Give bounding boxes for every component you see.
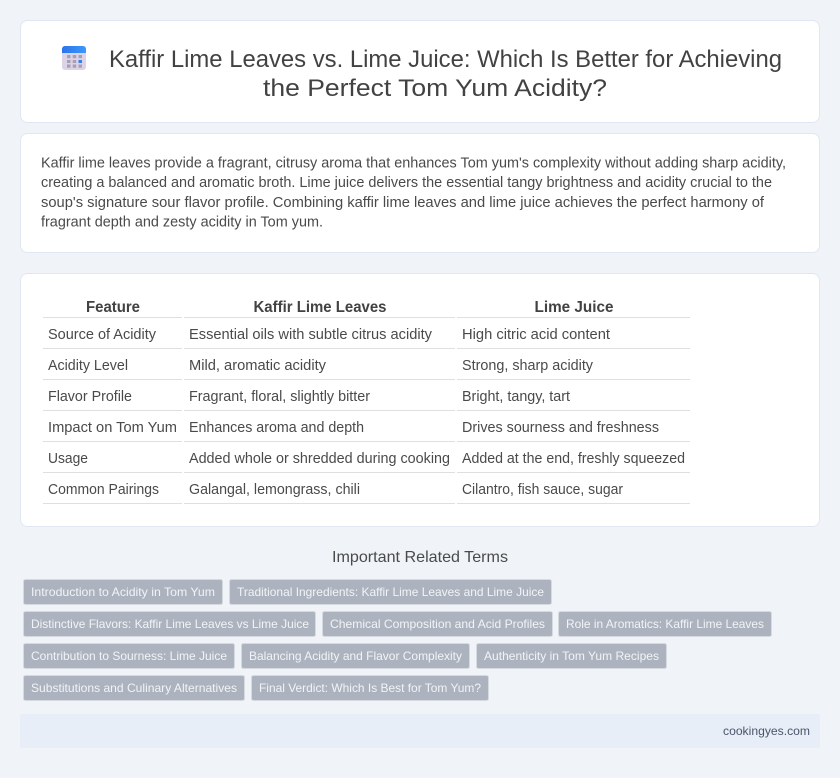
related term tags: Contribution to Sourness: Lime Juice <box>31 649 227 663</box>
summary text <box>41 156 786 230</box>
related term tags: Substitutions and Culinary Alternatives <box>31 681 237 695</box>
table rows: Common Pairings <box>48 482 159 498</box>
table rows: Essential oils with subtle citrus acidity <box>189 327 433 343</box>
related term tags: Final Verdict: Which Is Best for Tom Yum? <box>259 681 481 695</box>
table header: Kaffir Lime Leaves <box>254 299 387 316</box>
title: the Perfect Tom Yum Acidity? <box>263 75 607 102</box>
summary text: fragrant depth and zesty acidity in Tom yum. <box>41 214 323 230</box>
summary text: Kaffir lime leaves provide a fragrant, citrusy aroma that enhances Tom yum's complexity without adding sharp acidity, <box>41 156 786 172</box>
table header <box>86 299 614 316</box>
summary text: creating a balanced and aromatic broth. Lime juice delivers the essential tangy brightness and acidity crucial to the <box>41 175 772 191</box>
panel: comparison table <box>20 274 820 526</box>
related term tags <box>24 580 772 700</box>
table rows: Acidity Level <box>48 358 128 374</box>
related term tags: Authenticity in Tom Yum Recipes <box>484 649 659 663</box>
related term tags: Traditional Ingredients: Kaffir Lime Leaves and Lime Juice <box>237 585 544 599</box>
title: Kaffir Lime Leaves vs. Lime Juice: Which Is Better for Achieving <box>109 46 782 73</box>
table rows: Fragrant, floral, slightly bitter <box>189 389 370 405</box>
table rows: Mild, aromatic acidity <box>189 358 327 374</box>
table rows: Cilantro, fish sauce, sugar <box>462 482 623 498</box>
related term tags: Distinctive Flavors: Kaffir Lime Leaves vs Lime Juice <box>31 617 309 631</box>
related term tags: Chemical Composition and Acid Profiles <box>330 617 545 631</box>
table rows: Usage <box>48 451 88 467</box>
related term tags: Role in Aromatics: Kaffir Lime Leaves <box>566 617 764 631</box>
table rows: Strong, sharp acidity <box>462 358 594 374</box>
table rows: Source of Acidity <box>48 327 157 343</box>
table rows: Flavor Profile <box>48 389 132 405</box>
icon: calendar <box>62 46 86 70</box>
related term tags: Balancing Acidity and Flavor Complexity <box>249 649 462 663</box>
table rows: Impact on Tom Yum <box>48 420 177 436</box>
panel: title header <box>20 20 820 122</box>
related term tags: Introduction to Acidity in Tom Yum <box>31 585 215 599</box>
table header: Feature <box>86 299 140 316</box>
table rows: Bright, tangy, tart <box>462 389 570 405</box>
panel: summary <box>20 134 820 252</box>
title <box>109 46 782 102</box>
table rows: Added at the end, freshly squeezed <box>462 451 685 467</box>
table rows: High citric acid content <box>462 327 610 343</box>
table rows <box>48 327 685 498</box>
heading: important related terms: Important Related Terms <box>332 549 508 566</box>
footer <box>20 714 820 748</box>
table rows: Added whole or shredded during cooking <box>189 451 450 467</box>
table header: Lime Juice <box>534 299 614 316</box>
footer source text: cookingyes.com <box>723 724 810 738</box>
summary text: soup's signature sour flavor profile. Combining kaffir lime leaves and lime juice achieves the perfect harmony of <box>41 195 765 211</box>
table rows: Galangal, lemongrass, chili <box>189 482 360 498</box>
table rows: Enhances aroma and depth <box>189 420 364 436</box>
table rows: Drives sourness and freshness <box>462 420 659 436</box>
table rules <box>43 318 690 504</box>
